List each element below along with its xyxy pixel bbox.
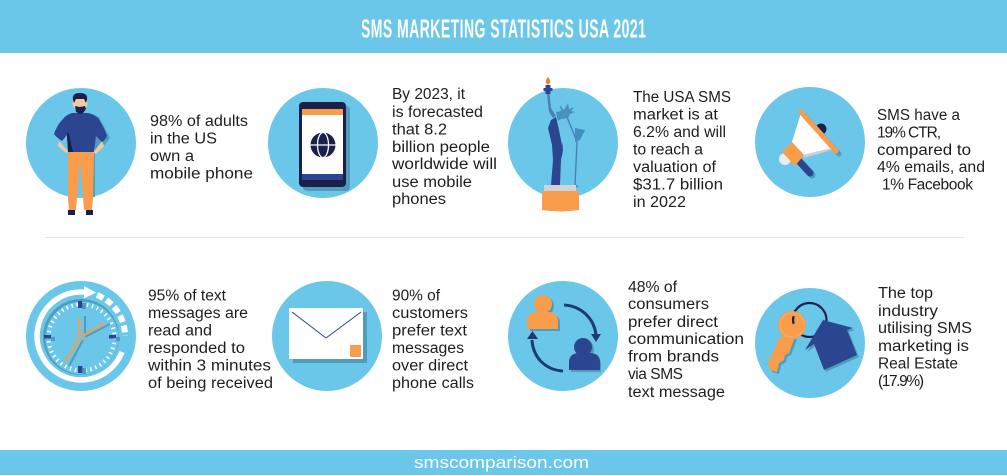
text: read rate: responded to: [148, 340, 245, 357]
footer banner: [0, 450, 1007, 475]
text: read rate: [147, 288, 273, 392]
text: prefer text: [392, 288, 474, 392]
text: ctr: 19% CTR,: [877, 124, 941, 142]
text: usa market: [633, 89, 731, 211]
text: real estate: industry: [878, 303, 938, 320]
text: forecast: that 8.2: [392, 122, 447, 138]
text: adults: own a: [150, 148, 194, 165]
text: usa market: $31.7 billion: [633, 176, 723, 194]
text: real estate: utilising SMS: [878, 320, 972, 337]
text: read rate: 95% of text: [148, 288, 227, 304]
text: ctr: 4% emails, and: [877, 159, 985, 176]
text: real estate: [878, 285, 972, 390]
text: ctr: 1% Facebook: [882, 176, 973, 194]
icon: man standing: [26, 88, 136, 215]
footer text: smscomparison.com: [414, 454, 589, 472]
text: prefer text: prefer text: [392, 322, 468, 340]
text: forecast: is forecasted: [392, 104, 483, 121]
text: direct communication: 48% of: [628, 279, 678, 296]
header banner: [0, 0, 1007, 53]
text: prefer text: customers: [392, 305, 468, 322]
text: forecast: phones: [392, 191, 446, 208]
text: prefer text: over direct: [392, 358, 469, 374]
text: forecast: [391, 86, 497, 208]
text: real estate: marketing is: [878, 338, 969, 355]
text: direct communication: prefer direct: [628, 314, 719, 331]
text: adults: [150, 113, 253, 182]
text: read rate: read and: [148, 322, 212, 340]
icon: envelope: [272, 281, 382, 391]
text: real estate: Real Estate: [878, 356, 958, 372]
text: ctr: compared to: [877, 142, 971, 159]
text: usa market: The USA SMS: [633, 89, 731, 106]
title: SMS MARKETING STATISTICS USA 2021: [361, 15, 646, 44]
text: usa market: in 2022: [633, 194, 686, 211]
text: real estate: (17.9%): [878, 373, 924, 390]
text: forecast: use mobile: [392, 174, 472, 191]
text: prefer text: messages: [392, 340, 464, 357]
text: read rate: of being received: [148, 375, 273, 392]
icon: clock: [26, 281, 136, 391]
text: usa market: to reach a: [633, 142, 703, 158]
text: forecast: billion people: [392, 139, 490, 156]
icon: smartphone: [268, 88, 378, 198]
text: adults: in the US: [150, 130, 217, 148]
text: direct communication: text message: [628, 384, 725, 401]
text: read rate: messages are: [148, 305, 248, 322]
icon: megaphone: [755, 87, 865, 197]
divider: [45, 236, 964, 238]
text: usa market: 6.2% and will: [633, 124, 726, 141]
text: direct communication: via SMS: [628, 366, 683, 383]
text: real estate: The top: [878, 285, 933, 302]
text: forecast: worldwide will: [391, 156, 497, 173]
icon: house keys: [755, 288, 865, 398]
text: ctr: SMS have a: [877, 107, 960, 124]
text: direct communication: communication: [628, 331, 744, 348]
text: adults: 98% of adults: [150, 113, 248, 130]
icon: people exchange: [508, 281, 618, 391]
text: ctr: [877, 107, 985, 194]
text: usa market: market is at: [633, 106, 719, 124]
icon: statue of liberty: [508, 77, 618, 212]
text: read rate: within 3 minutes: [147, 358, 271, 374]
text: direct communication: consumers: [628, 296, 709, 313]
text: direct communication: from brands: [628, 348, 719, 366]
text: direct communication: [628, 279, 744, 401]
text: adults: mobile phone: [150, 166, 253, 182]
text: usa market: valuation of: [633, 159, 717, 176]
text: forecast: By 2023, it: [392, 86, 466, 103]
text: prefer text: 90% of: [392, 288, 441, 304]
text: prefer text: phone calls: [392, 375, 474, 392]
